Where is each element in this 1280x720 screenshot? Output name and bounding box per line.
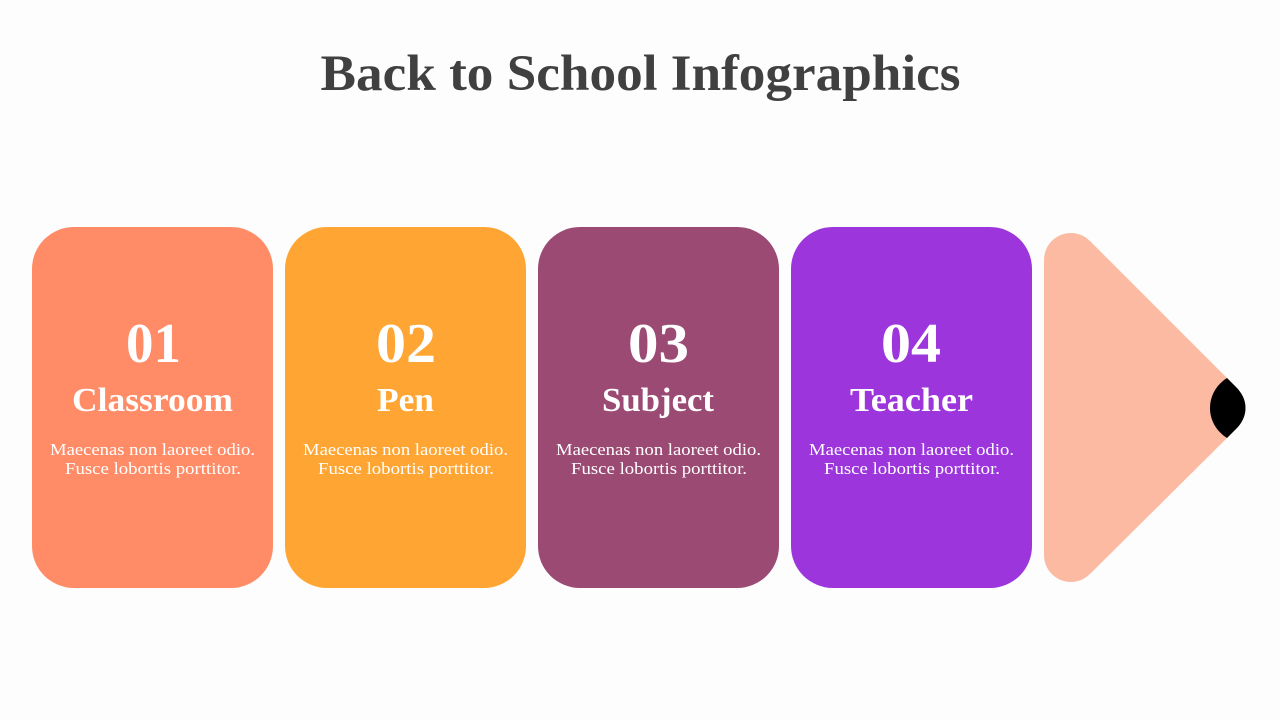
panel: 01 Classroom [32, 227, 273, 588]
text block: description: Maecenas non laoreet odio. [50, 440, 255, 459]
text block: description [50, 440, 255, 478]
text block: description [809, 440, 1014, 478]
pencil lead [1210, 378, 1246, 438]
icon: pencil tip [1044, 233, 1246, 582]
text block: description [303, 440, 508, 478]
heading: Classroom: Classroom [72, 382, 233, 419]
heading: Pen: Pen [377, 382, 434, 419]
text block: description: Maecenas non laoreet odio. [556, 440, 761, 459]
panel: 03 Subject [538, 227, 779, 588]
text block: description: Fusce lobortis porttitor. [65, 459, 241, 478]
number 03: 03 [628, 313, 689, 375]
panel: 02 Pen [285, 227, 526, 588]
text block: description [556, 440, 761, 478]
text block: description: Maecenas non laoreet odio. [303, 440, 508, 459]
title: Back to School Infographics [320, 46, 960, 102]
heading: Teacher: Teacher [850, 382, 973, 419]
heading: Subject: Subject [602, 382, 715, 419]
text block: description: Fusce lobortis porttitor. [571, 459, 747, 478]
text block: description: Maecenas non laoreet odio. [809, 440, 1014, 459]
text block: description: Fusce lobortis porttitor. [824, 459, 1000, 478]
pencil wood cone [1044, 233, 1246, 582]
text block: description: Fusce lobortis porttitor. [318, 459, 494, 478]
panel: 04 Teacher [791, 227, 1032, 588]
number 04: 04 [881, 313, 941, 375]
number 01: 01 [126, 313, 181, 375]
number 02: 02 [376, 313, 436, 375]
